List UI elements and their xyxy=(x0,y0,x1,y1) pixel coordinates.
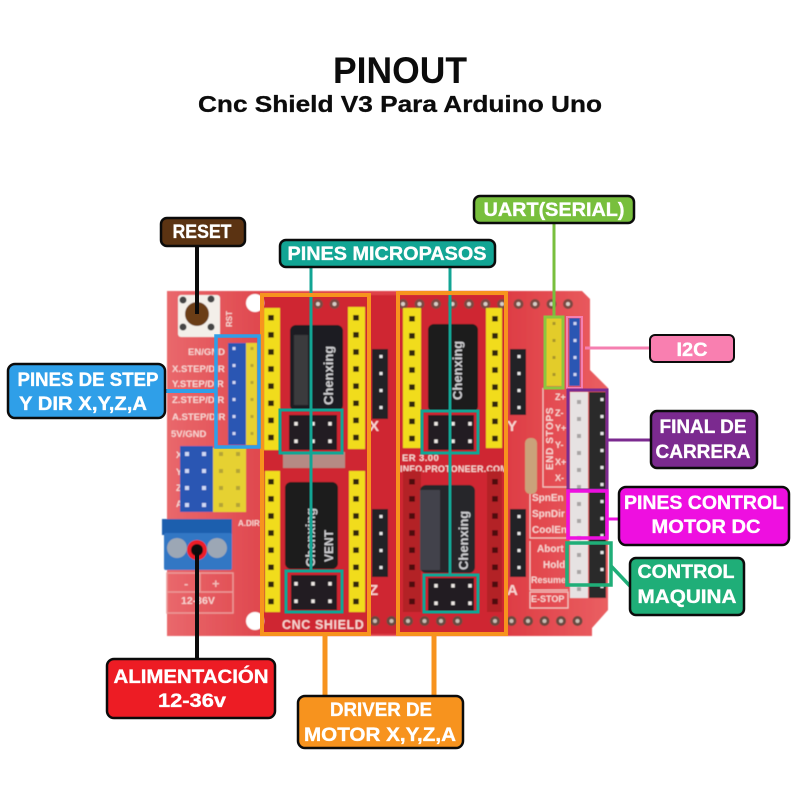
power terminal block: - xyxy=(184,576,188,591)
label: uart xyxy=(474,196,634,223)
label: pines control motor dc: MOTOR DC xyxy=(652,517,761,538)
label: alimentacion: ALIMENTACIÓN xyxy=(114,666,268,688)
board silkscreen labels: Y xyxy=(507,418,517,435)
machine control line xyxy=(611,566,630,586)
board silkscreen labels: INFO.PROTONEER.COM xyxy=(400,464,508,474)
highlight boxes xyxy=(216,293,611,634)
machine control box xyxy=(567,543,611,585)
label: pines micropasos xyxy=(280,240,495,267)
driver boxes xyxy=(262,293,506,634)
label: uart: UART(SERIAL) xyxy=(484,200,624,221)
board silkscreen labels: X+ xyxy=(555,457,566,467)
driver zone shading xyxy=(262,295,506,634)
label: final de carrera: FINAL DE xyxy=(660,417,746,438)
socket holes xyxy=(271,315,495,612)
board silkscreen labels: A.STEP/DIR xyxy=(172,412,225,423)
board silkscreen labels xyxy=(171,311,567,632)
driver lines xyxy=(325,635,434,696)
uart line xyxy=(552,222,556,318)
board silkscreen labels: CoolEn xyxy=(532,525,567,536)
board silkscreen labels: Y xyxy=(176,467,182,477)
board silkscreen labels: Z- xyxy=(555,408,564,418)
board silkscreen labels: X- xyxy=(555,473,564,483)
board silkscreen labels: X.STEP/DIR xyxy=(172,364,225,375)
label: pines de step: PINES DE STEP xyxy=(18,370,159,391)
yellow driver sockets, left xyxy=(264,307,502,612)
board silkscreen labels: A xyxy=(507,582,518,599)
board silkscreen labels: SpnDir xyxy=(532,509,565,520)
board silkscreen labels: Y.STEP/DIR xyxy=(172,379,224,390)
label: i2c: I2C xyxy=(676,340,708,361)
capacitor markings: Chenxing xyxy=(450,341,465,400)
connector lines xyxy=(165,222,650,696)
board silkscreen labels: Resume xyxy=(531,575,566,585)
capacitor markings xyxy=(303,341,471,570)
final de carrera box xyxy=(568,390,607,490)
board silkscreen labels: Hold xyxy=(543,560,565,571)
red driver sockets, right xyxy=(403,471,502,612)
board silkscreen labels: Abort xyxy=(537,544,564,555)
board silkscreen labels: Z+ xyxy=(555,392,566,402)
step dir box xyxy=(216,336,259,447)
capacitor markings: VENT xyxy=(322,529,336,562)
micropasos boxes xyxy=(280,410,478,612)
board silkscreen labels: END STOPS xyxy=(545,407,556,470)
board silkscreen labels: 12-36V xyxy=(181,595,215,607)
board silkscreen labels: Y+ xyxy=(555,423,566,433)
label: alimentacion: 12-36v xyxy=(158,691,226,712)
power line xyxy=(195,552,199,660)
label: alimentacion xyxy=(107,659,275,718)
motor control box xyxy=(568,491,607,538)
board silkscreen labels: 5V/GND xyxy=(171,429,207,440)
motor control line xyxy=(608,518,619,520)
driver black pin blocks xyxy=(289,415,474,611)
board silkscreen labels: A xyxy=(176,499,183,509)
title: PINOUT xyxy=(333,50,467,91)
jumper pin tips xyxy=(296,422,470,612)
power terminal block xyxy=(162,519,233,613)
board silkscreen labels: Y- xyxy=(555,440,564,450)
label: final de carrera: CARRERA xyxy=(656,442,751,463)
circuit board xyxy=(162,291,608,636)
micropasos lines xyxy=(311,267,450,575)
label: driver de motor: MOTOR X,Y,Z,A xyxy=(304,725,456,746)
label: pines de step: Y DIR X,Y,Z,A xyxy=(19,394,147,415)
label: pines control motor dc: PINES CONTROL xyxy=(624,493,784,514)
label: control maquina: MAQUINA xyxy=(638,587,737,608)
board silkscreen labels: Z xyxy=(369,582,378,599)
label: control maquina: CONTROL xyxy=(638,562,735,583)
board silkscreen labels: Z.STEP/DIR xyxy=(172,395,224,406)
board silkscreen labels: E-STOP xyxy=(531,594,564,604)
board silkscreen labels: ER 3.00 xyxy=(402,453,439,464)
board silkscreen labels: CNC SHIELD xyxy=(282,618,364,632)
uart box xyxy=(545,317,563,388)
capacitors xyxy=(285,324,478,573)
board silkscreen labels: X xyxy=(176,450,182,460)
step and dir header pins xyxy=(228,343,257,445)
reset line xyxy=(195,246,199,314)
step dir line xyxy=(165,389,216,393)
label: pines control motor dc xyxy=(619,487,789,545)
i2c box xyxy=(567,317,582,388)
board silkscreen labels: SpnEn xyxy=(532,493,564,504)
reset button xyxy=(178,295,220,337)
board silkscreen labels: X xyxy=(369,418,379,435)
label: pines micropasos: PINES MICROPASOS xyxy=(288,244,486,265)
board outline xyxy=(167,291,608,636)
crystal and resistor xyxy=(283,438,537,494)
capacitor markings: Chenxing xyxy=(303,508,318,567)
label: i2c xyxy=(650,335,734,362)
board silkscreen labels: RST xyxy=(225,311,234,327)
UART and I2C headers xyxy=(546,318,580,386)
silkscreen frames xyxy=(530,388,568,608)
end stop, control pin headers xyxy=(570,392,606,598)
final de carrera line xyxy=(608,438,650,442)
label: control maquina xyxy=(630,558,744,615)
label: driver de motor: DRIVER DE xyxy=(330,700,432,721)
side motor headers xyxy=(372,349,526,577)
top and bottom header pads xyxy=(318,304,582,621)
board silkscreen labels: Z xyxy=(176,483,182,493)
capacitor markings: Chenxing xyxy=(456,511,471,570)
power terminal block: + xyxy=(212,576,220,591)
label: reset: RESET xyxy=(172,222,232,243)
board silkscreen labels: EN/GND xyxy=(188,347,225,358)
subtitle: Cnc Shield V3 Para Arduino Uno xyxy=(198,91,602,117)
capacitor markings: Chenxing xyxy=(321,346,336,405)
board silkscreen labels: A.DIR xyxy=(238,519,260,528)
label: reset xyxy=(161,218,245,246)
label: driver de motor xyxy=(298,696,463,748)
label: pines de step xyxy=(8,364,165,418)
microstepping jumper pins xyxy=(180,446,246,512)
label: final de carrera xyxy=(651,411,757,468)
mounting holes xyxy=(246,294,264,630)
i2c line xyxy=(585,346,650,350)
